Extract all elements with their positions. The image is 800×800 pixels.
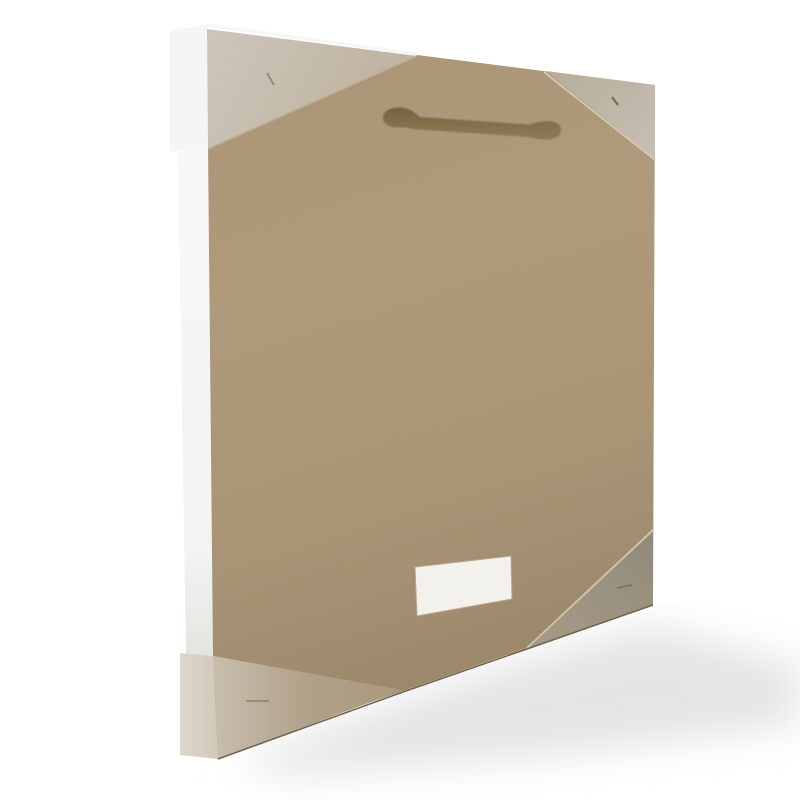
- cardboard backing board: [208, 55, 655, 756]
- staple mark: [612, 97, 618, 105]
- white frame side edge: [178, 147, 214, 656]
- floor shadow: [230, 625, 800, 775]
- staple mark: [617, 585, 632, 588]
- staple mark: [267, 73, 274, 85]
- corner protector: bottom left: [180, 653, 403, 759]
- corner protector: top left: [170, 25, 417, 152]
- hanging slot: [383, 108, 561, 140]
- corner protector: top right: [544, 71, 655, 160]
- staple mark: [246, 700, 269, 702]
- corner protector: bottom right: [527, 530, 653, 648]
- illustration: back of picture frame: [170, 24, 800, 784]
- dark lower edge line: [218, 605, 653, 759]
- white label rectangle: [415, 556, 512, 616]
